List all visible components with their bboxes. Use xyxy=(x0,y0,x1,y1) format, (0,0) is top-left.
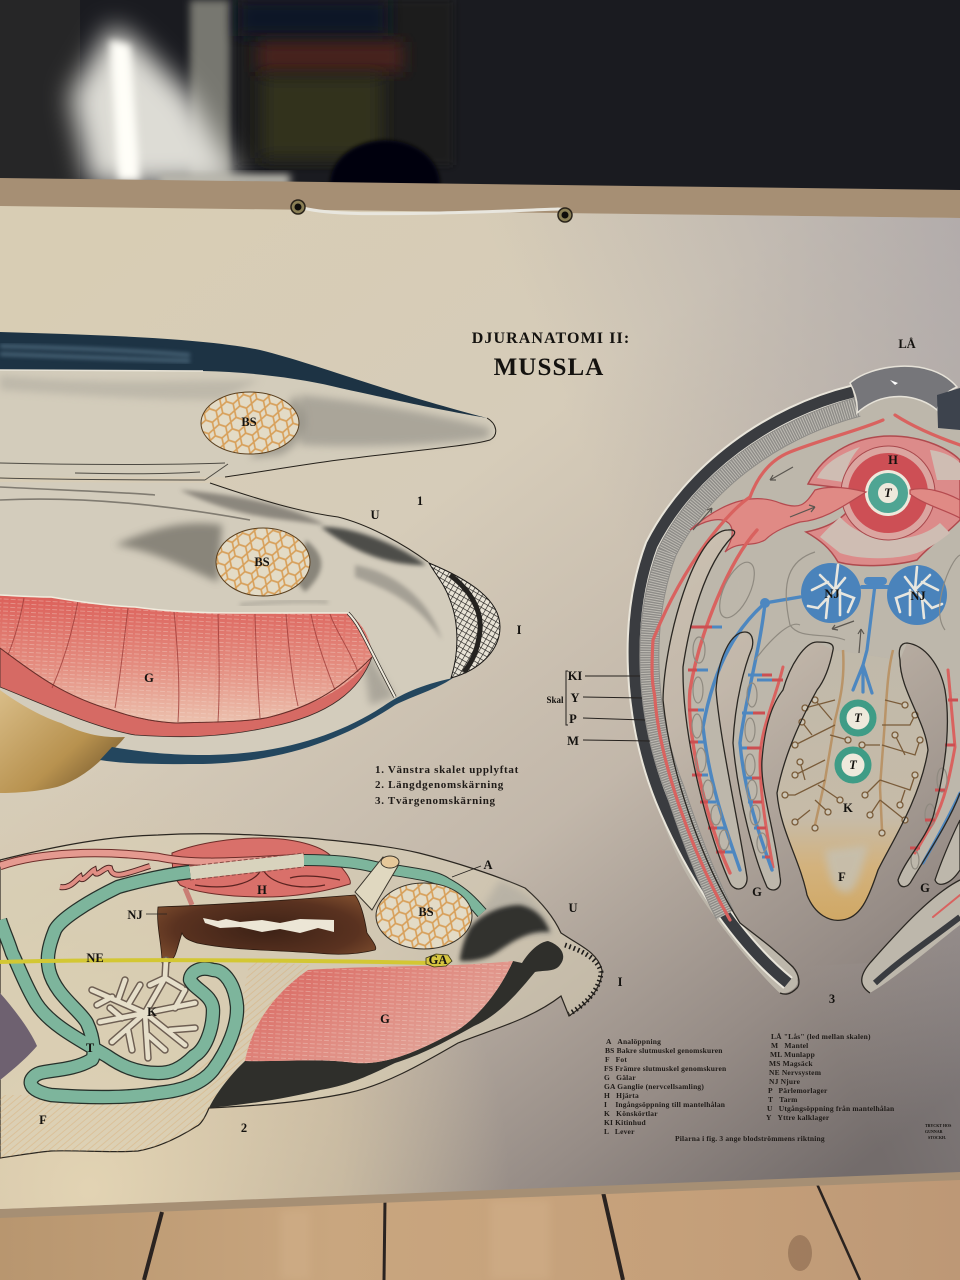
muscle BS lower xyxy=(216,528,310,596)
body tissue and mantle xyxy=(660,401,960,695)
poster sheet xyxy=(0,206,960,1209)
figure 1: upper shell section xyxy=(0,332,496,480)
shell layer labels: KI xyxy=(568,669,582,683)
figure labels: G xyxy=(920,881,930,895)
intestine sections in foot xyxy=(838,703,873,780)
legend left column: KI Kitinhud xyxy=(604,1118,646,1127)
adductor muscle BS fig 2 xyxy=(355,856,472,949)
intestine T xyxy=(0,860,482,1097)
figure 1: lower shell with gills xyxy=(0,482,500,793)
nerve NE xyxy=(0,960,432,963)
legend left column: K Könskörtlar xyxy=(604,1109,658,1118)
liver mass xyxy=(0,993,37,1080)
legend left column xyxy=(604,1037,727,1136)
prismatic striped band xyxy=(649,407,858,915)
foot fig 1 xyxy=(0,690,125,793)
figure labels: NJ xyxy=(127,908,143,922)
intestine section T xyxy=(865,470,911,516)
legend right column: P Pärlemorlager xyxy=(768,1086,828,1095)
shell layer labels: Skal xyxy=(546,695,564,705)
legend left column: I Ingångsöppning till mantelhålan xyxy=(604,1100,726,1109)
muscle BS upper xyxy=(201,392,299,454)
kidney NJ xyxy=(158,895,376,965)
shell band dark xyxy=(634,392,853,983)
gills right xyxy=(898,690,960,887)
wall background xyxy=(0,0,456,184)
figure labels: 2 xyxy=(241,1121,247,1135)
figure labels: G xyxy=(144,671,154,685)
shell layer labels: M xyxy=(567,734,579,748)
hinge teeth xyxy=(429,563,500,678)
figure 2: body outline xyxy=(0,834,602,1158)
pocket and organ outlines xyxy=(663,530,960,994)
figure key: 1. Vänstra skalet upplyftat xyxy=(375,764,519,776)
legend right column: M Mantel xyxy=(771,1041,808,1050)
figure key xyxy=(375,764,519,807)
figure key: 2. Längdgenomskärning xyxy=(375,779,504,791)
figure labels: H xyxy=(257,883,267,897)
figure labels: NJ xyxy=(824,587,840,601)
gonad K xyxy=(92,960,195,1058)
legend left column: F Fot xyxy=(605,1055,627,1064)
publisher imprint xyxy=(925,1123,952,1140)
shell layer labels xyxy=(546,669,650,748)
gill cross vessels and loops xyxy=(688,627,958,869)
figure labels: 1 xyxy=(417,494,423,508)
legend right column xyxy=(766,1032,895,1122)
hinge ligament xyxy=(850,366,957,413)
title: DJURANATOMI II: xyxy=(472,330,630,347)
legend left column: G Gälar xyxy=(604,1073,636,1082)
figure labels: 3 xyxy=(829,992,835,1006)
mantle cavity xyxy=(663,530,960,967)
circulation arrows xyxy=(693,467,864,653)
figure labels: F xyxy=(39,1113,47,1127)
publisher imprint: GUNNAR xyxy=(925,1129,943,1134)
shell layer labels: Y xyxy=(570,691,580,705)
pericardium and heart H xyxy=(806,436,960,566)
legend left column: H Hjärta xyxy=(604,1091,639,1100)
figure labels: T xyxy=(86,1041,95,1055)
gills G fig 1 xyxy=(0,595,395,737)
figure labels: T xyxy=(854,711,863,725)
publisher imprint: TRYCKT HOS xyxy=(925,1123,952,1128)
figure labels xyxy=(39,337,930,1135)
figure labels: T xyxy=(884,486,893,500)
legend right column: Y Yttre kalklager xyxy=(766,1113,830,1122)
hanging cord and eyelets xyxy=(291,200,572,222)
legend right column: NE Nervsystem xyxy=(769,1068,822,1077)
shell layer labels: P xyxy=(569,712,577,726)
figure 3: cross section xyxy=(634,366,960,994)
legend right column: LÅ "Lås" (led mellan skalen) xyxy=(771,1032,871,1041)
ganglion GA xyxy=(426,954,452,967)
gill 2 left xyxy=(734,724,780,890)
figure labels: H xyxy=(888,453,898,467)
foot hatching xyxy=(0,960,310,1158)
figure labels: BS xyxy=(254,555,270,569)
legend right column: T Tarm xyxy=(768,1095,798,1104)
figure labels: T xyxy=(849,758,858,772)
wooden floor xyxy=(0,1170,960,1280)
rectum and labial palp xyxy=(0,853,304,887)
publisher imprint: STOCKH. xyxy=(928,1135,946,1140)
figure labels: NE xyxy=(86,951,104,965)
hinge dark mantle fig 2 xyxy=(209,880,601,1108)
figure labels: K xyxy=(147,1005,157,1019)
gill 1 left xyxy=(683,537,747,889)
legend left column: BS Bakre slutmuskel genomskuren xyxy=(605,1046,723,1055)
blood vessels blue xyxy=(703,581,960,870)
heart H xyxy=(172,838,350,905)
shell margin navy xyxy=(100,678,453,764)
figure labels: A xyxy=(483,858,493,872)
figure labels: U xyxy=(370,508,380,522)
legend left column: GA Ganglie (nervcellsamling) xyxy=(604,1082,704,1091)
legend left column: A Analöppning xyxy=(606,1037,661,1046)
foot xyxy=(777,650,928,920)
figure labels: I xyxy=(517,623,522,637)
figure labels: U xyxy=(568,901,578,915)
figure labels: BS xyxy=(418,905,434,919)
legend right column: NJ Njure xyxy=(769,1077,801,1086)
figure labels: G xyxy=(752,885,762,899)
figure labels: K xyxy=(843,801,853,815)
figure labels: BS xyxy=(241,415,257,429)
title xyxy=(472,330,630,381)
figure labels: LÅ xyxy=(898,337,916,351)
kidneys NJ xyxy=(801,563,947,625)
legend left column: FS Främre slutmuskel genomskuren xyxy=(604,1064,727,1073)
title: MUSSLA xyxy=(494,354,604,381)
legend right column: MS Magsäck xyxy=(769,1059,813,1068)
reproductive glands K xyxy=(782,650,923,836)
figure labels: NJ xyxy=(910,589,926,603)
legend note: Pilarna i fig. 3 ange blodströmmens riktning xyxy=(675,1134,825,1143)
right shell band xyxy=(875,917,960,983)
blood vessels red xyxy=(652,415,960,920)
figure labels: I xyxy=(618,975,623,989)
figure key: 3. Tvärgenomskärning xyxy=(375,795,496,807)
figure labels: F xyxy=(838,870,846,884)
legend right column: ML Munlapp xyxy=(770,1050,815,1059)
figure labels: G xyxy=(380,1012,390,1026)
legend right column: U Utgångsöppning från mantelhålan xyxy=(767,1104,895,1113)
gills G fig 2 xyxy=(245,961,513,1063)
legend left column: L Lever xyxy=(604,1127,635,1136)
figure labels: GA xyxy=(429,953,447,967)
